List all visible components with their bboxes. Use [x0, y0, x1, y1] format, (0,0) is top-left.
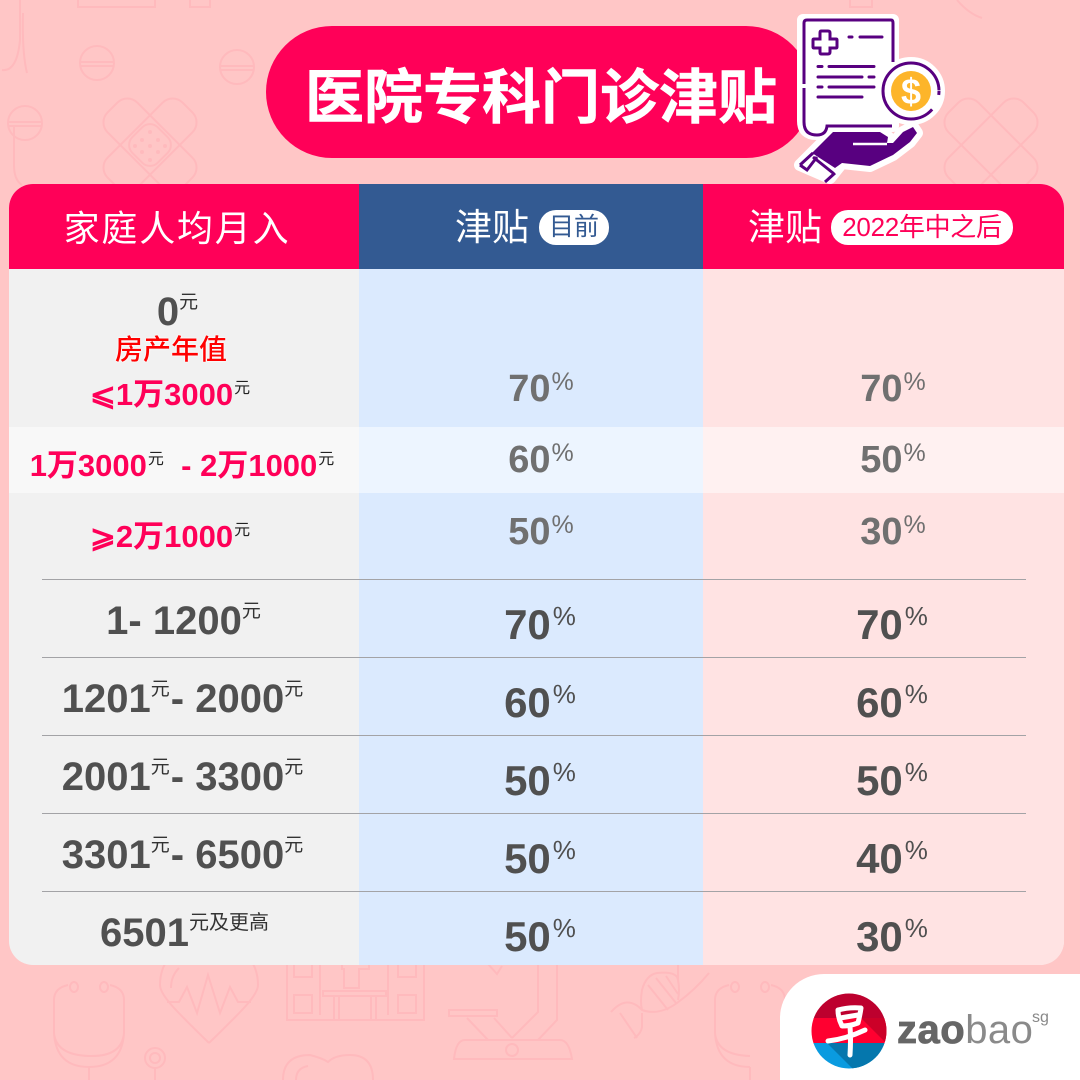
- percent rows after: 50%: [856, 757, 928, 804]
- badge: current: 目前: [549, 213, 599, 241]
- header: household income: [9, 184, 359, 269]
- logo panel: [780, 974, 1080, 1080]
- row 1 income: zero: 0元: [157, 290, 198, 334]
- income 1-1200: 1- 1200元: [106, 599, 261, 643]
- header label: subsidy after: 津贴: [748, 207, 822, 248]
- row 3 threshold: ⩾2万1000元: [90, 519, 250, 554]
- percent rows after: 70%: [856, 601, 928, 648]
- income 1201-2000: 1201元- 2000元: [62, 677, 303, 721]
- row 1 threshold: ⩽1万3000元: [90, 377, 250, 412]
- column: current subsidy: [359, 269, 703, 965]
- percent rows current: 50%: [504, 835, 576, 882]
- percent rows after: 40%: [856, 835, 928, 882]
- highlighted row band: [9, 427, 1064, 493]
- logo superscript: sg: [1032, 1009, 1049, 1026]
- icon: medical bill, coin and hand: [794, 14, 945, 184]
- percent 60 current: 60%: [508, 439, 574, 481]
- title text: 医院专科门诊津贴: [305, 65, 777, 131]
- percent 70 after: 70%: [860, 368, 926, 410]
- percent rows after: [856, 601, 928, 960]
- hand: [812, 127, 917, 168]
- income 6501 and above: 6501元及更高: [100, 911, 269, 955]
- percent rows current: 60%: [504, 679, 576, 726]
- coin: [883, 63, 939, 119]
- percent 70 current: 70%: [508, 368, 574, 410]
- percent 50 current: 50%: [508, 511, 574, 553]
- title pill: [266, 26, 812, 158]
- icon: medical bill, coin and hand: $: [901, 71, 921, 112]
- header: current: [359, 184, 703, 269]
- percent rows current: [504, 601, 576, 960]
- cross: [813, 31, 837, 54]
- percent rows current: 50%: [504, 757, 576, 804]
- column: subsidy after mid 2022: [703, 269, 1064, 965]
- badge: current: [539, 210, 609, 245]
- lines: [818, 37, 882, 97]
- logo mark: [812, 994, 886, 1068]
- table panel: [9, 184, 1064, 965]
- income 3301-6500: 3301元- 6500元: [62, 833, 303, 877]
- logo wordmark: zaobao: [897, 1008, 1033, 1052]
- header label: subsidy current: 津贴: [455, 207, 529, 248]
- paper: [804, 20, 893, 135]
- badge: after mid 2022: 2022年中之后: [842, 212, 1002, 242]
- header label: household income: 家庭人均月入: [64, 208, 290, 249]
- label: annual value: 房产年值: [115, 334, 227, 365]
- percent rows after: 60%: [856, 679, 928, 726]
- percent rows after: 30%: [856, 913, 928, 960]
- percent 30 after: 30%: [860, 511, 926, 553]
- income 2001-3300: 2001元- 3300元: [62, 755, 303, 799]
- header: after 2022: [703, 184, 1064, 269]
- percent rows current: 50%: [504, 913, 576, 960]
- row 2 threshold: 1万3000元 - 2万1000元: [30, 448, 334, 483]
- percent rows current: 70%: [504, 601, 576, 648]
- percent 50 after: 50%: [860, 439, 926, 481]
